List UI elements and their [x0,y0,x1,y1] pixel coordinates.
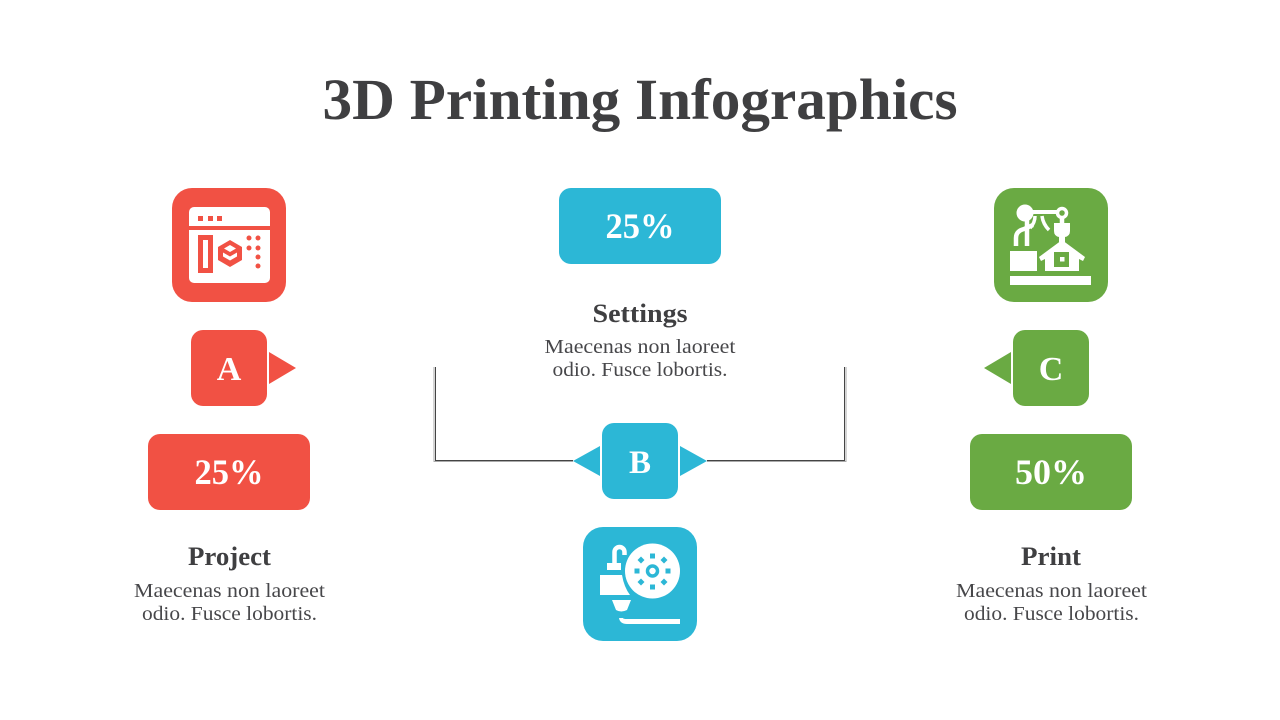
percentage: 50% print [970,434,1132,510]
percentage: 25% settings [559,188,721,264]
panel: settings [544,188,736,641]
text: project description: Maecenas non laoreet [134,580,325,602]
badge: B [573,423,707,499]
heading: project: Project [188,542,271,571]
text: settings description: Maecenas non laoreet [544,336,736,358]
panel: print [956,188,1147,625]
percentage: 25% project: 25% [194,452,264,492]
heading: settings: Settings [592,299,688,328]
text: print description: Maecenas non laoreet [956,580,1147,602]
icon: robotic arm printing a house [994,188,1108,302]
badge: C: C [1039,351,1063,388]
text: project description [134,580,325,625]
badge: C [984,330,1089,406]
panel: project [134,188,325,625]
badge: A: A [217,351,242,388]
title: 3D Printing Infographics [322,67,958,132]
percentage: 25% project [148,434,310,510]
heading: print: Print [1021,542,1081,571]
connector lines [434,367,846,462]
icon: filament spool and extruder [583,527,697,641]
percentage: 50% print: 50% [1015,452,1087,492]
text: settings description: odio. Fusce lobortis. [552,359,728,381]
text: project description: odio. Fusce lobortis. [142,603,317,625]
badge: A [191,330,296,406]
text: settings description [544,336,736,381]
badge: B: B [629,445,651,481]
text: print description [956,580,1147,625]
icon: project window with cube [172,188,286,302]
text: print description: odio. Fusce lobortis. [964,603,1139,625]
percentage: 25% settings: 25% [606,206,674,246]
